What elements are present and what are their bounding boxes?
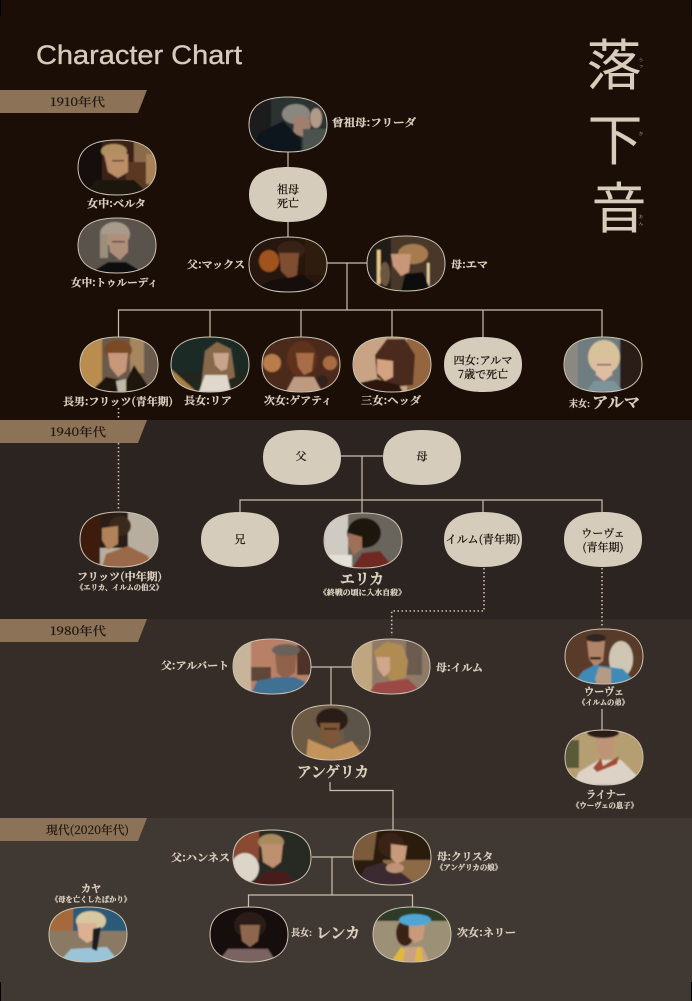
label: 長男:フリッツ(青年期): 長男:フリッツ(青年期) bbox=[63, 394, 173, 409]
background: 1980s section bbox=[0, 619, 692, 818]
label: 母:イルム: 母:イルム bbox=[436, 660, 483, 675]
label: フリッツ(中年期): フリッツ(中年期) bbox=[77, 569, 162, 584]
label: 長女:レンカ: 長女: bbox=[291, 925, 312, 939]
era band: 1910年代 bbox=[0, 90, 147, 113]
title: Character Chart bbox=[36, 40, 243, 70]
connector lines: present family tree bbox=[248, 857, 412, 907]
label: アンゲリカ: アンゲリカ bbox=[297, 761, 369, 782]
pill: ウーヴェ(青年期): (青年期) bbox=[582, 539, 624, 555]
pill: イルム(青年期) bbox=[444, 512, 522, 567]
pill: 祖母死亡: 祖母 bbox=[277, 181, 299, 197]
label: ウーヴェ: ウーヴェ bbox=[584, 684, 624, 699]
label: ライナー: ライナー bbox=[586, 787, 626, 802]
label: 末女:アルマ: 末女: bbox=[569, 396, 590, 410]
label: エリカ、イルムの伯父: 《エリカ、イルムの伯父》 bbox=[76, 582, 163, 593]
connector lines: 1910s family tree bbox=[118, 152, 602, 337]
pill: 四女:アルマ 7歳で死亡: 四女:アルマ bbox=[454, 352, 512, 368]
portrait: Fritz young bbox=[80, 337, 158, 392]
film title: 落下音: 落 bbox=[586, 21, 642, 101]
dotted line: Fritz young to middle age bbox=[118, 408, 120, 511]
era band: 1910年代: 1910年代 bbox=[50, 94, 106, 110]
label: 曾祖母:フリーダ: 曾祖母:フリーダ bbox=[332, 115, 417, 130]
era band: 現代(2020年代) bbox=[0, 818, 147, 841]
portrait: Hedda bbox=[353, 337, 431, 392]
portrait: Erika bbox=[324, 513, 402, 568]
film title: 落下音 bbox=[586, 21, 647, 244]
label: 父:マックス: 父:マックス bbox=[187, 257, 245, 272]
portrait: Ilm bbox=[352, 639, 430, 694]
label: ウーヴェの息子: 《ウーヴェの息子》 bbox=[572, 800, 638, 811]
label: 母:クリスタ: 母:クリスタ bbox=[437, 849, 493, 864]
label: 終戦の頃に入水自殺: 《終戦の頃に入水自殺》 bbox=[319, 587, 406, 598]
film title: 落下音: お bbox=[639, 213, 643, 220]
portrait: Lea bbox=[171, 337, 249, 392]
pill: 四女:アルマ 7歳で死亡 bbox=[444, 337, 522, 392]
era band: 1980年代: 1980年代 bbox=[50, 623, 107, 639]
portrait: Kaya bbox=[49, 907, 127, 962]
portrait: Rainer bbox=[565, 728, 643, 785]
label: 長女:レンカ: レンカ bbox=[316, 922, 360, 943]
connector lines: 1980s family tree bbox=[311, 667, 602, 830]
portrait: Lenka bbox=[210, 907, 288, 962]
label: 次女:ゲアティ: 次女:ゲアティ bbox=[264, 393, 332, 408]
dotted line: Uwe young to Uwe bbox=[601, 568, 603, 627]
label: 母:エマ: 母:エマ bbox=[451, 257, 488, 272]
film title: 落下音: ん bbox=[639, 221, 643, 227]
pill: ウーヴェ(青年期): ウーヴェ bbox=[581, 525, 625, 541]
pill: 四女:アルマ 7歳で死亡: 7歳で死亡 bbox=[458, 366, 508, 382]
film title: 落下音: か bbox=[639, 130, 643, 137]
portrait: Frieda bbox=[249, 97, 327, 152]
background: 1940s section bbox=[0, 420, 692, 619]
portrait: Max bbox=[249, 237, 327, 292]
portrait: Hannes bbox=[231, 830, 311, 885]
label: 次女:ネリー: 次女:ネリー bbox=[457, 925, 516, 940]
portrait: Emma bbox=[367, 236, 445, 291]
portrait: Uwe bbox=[565, 629, 643, 684]
film title: 落下音: っ bbox=[639, 63, 643, 69]
label: 母を亡くしたばかり: 《母を亡くしたばかり》 bbox=[51, 894, 131, 905]
portrait: Albert bbox=[233, 639, 311, 694]
portrait: Berta bbox=[78, 140, 156, 195]
pill: 母: 母 bbox=[416, 448, 428, 464]
portrait: Greta bbox=[262, 337, 340, 392]
portrait: Fritz middle age bbox=[80, 512, 158, 567]
pill: 祖母死亡 bbox=[249, 167, 327, 222]
pill: 母 bbox=[383, 430, 461, 485]
label: 父:ハンネス: 父:ハンネス bbox=[171, 850, 230, 865]
portrait: Angelika bbox=[292, 705, 370, 760]
background: present section bbox=[0, 818, 692, 1001]
label: カヤ: カヤ bbox=[81, 881, 101, 896]
pill: 祖母死亡: 死亡 bbox=[277, 195, 299, 211]
label: アンゲリカの娘: 《アンゲリカの娘》 bbox=[436, 862, 502, 873]
connector lines: 1940s family tree bbox=[240, 456, 602, 513]
label: 末女:アルマ: アルマ bbox=[592, 390, 640, 413]
film title: 落下音: 音 bbox=[591, 164, 647, 244]
portrait: Trude bbox=[78, 218, 156, 273]
film title: 落下音: 下 bbox=[587, 96, 643, 176]
label: 三女:ヘッダ: 三女:ヘッダ bbox=[361, 393, 422, 408]
pill: イルム(青年期): イルム(青年期) bbox=[446, 531, 520, 547]
film title: 落下音: ら bbox=[639, 57, 643, 63]
pill: ウーヴェ(青年期) bbox=[564, 512, 642, 567]
label: 末女:アルマ bbox=[569, 390, 640, 413]
pill: 父 bbox=[263, 430, 341, 485]
label: 女中:ベルタ: 女中:ベルタ bbox=[87, 196, 146, 211]
label: 長女:リア: 長女:リア bbox=[184, 393, 232, 408]
label: 父:アルバート: 父:アルバート bbox=[161, 658, 229, 673]
label: 長女:レンカ bbox=[291, 922, 360, 943]
background: 1910s section bbox=[0, 0, 692, 420]
label: 女中:トゥルーディ: 女中:トゥルーディ bbox=[71, 275, 158, 290]
label: エリカ: エリカ bbox=[340, 568, 384, 589]
era band: 現代(2020年代): 現代(2020年代) bbox=[46, 822, 129, 838]
pill: 兄 bbox=[201, 512, 279, 567]
dotted line: Ilm young to mother bbox=[392, 568, 484, 636]
portrait: Alma bbox=[564, 337, 642, 392]
era band: 1940年代 bbox=[0, 420, 147, 443]
label: イルムの弟: 《イルムの弟》 bbox=[578, 697, 629, 708]
pill: 父: 父 bbox=[296, 448, 306, 464]
pill: 兄: 兄 bbox=[234, 531, 246, 547]
portrait: Christa bbox=[353, 830, 431, 885]
era band: 1940年代: 1940年代 bbox=[50, 424, 107, 440]
portrait: Nelly bbox=[373, 907, 451, 962]
era band: 1980年代 bbox=[0, 619, 147, 642]
